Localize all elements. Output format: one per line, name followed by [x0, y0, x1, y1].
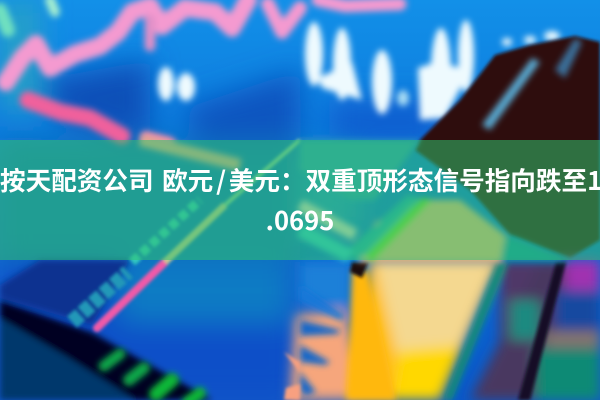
pink line chart [0, 0, 400, 142]
title text: 按天配资公司 欧元/美元：双重顶形态信号指向跌至1 [0, 161, 600, 198]
upper band details: chart streaks and tablet under the band [140, 140, 572, 262]
translucent green band [0, 140, 600, 260]
title text [0, 161, 600, 238]
lower right photo: bright page and tablet [290, 260, 600, 400]
white bar peaks [158, 20, 560, 120]
dark hand silhouette [415, 36, 600, 258]
title text: .0695 [266, 201, 334, 238]
lower left: dark edge, green digits, teal numbers, pink bar [0, 260, 212, 400]
